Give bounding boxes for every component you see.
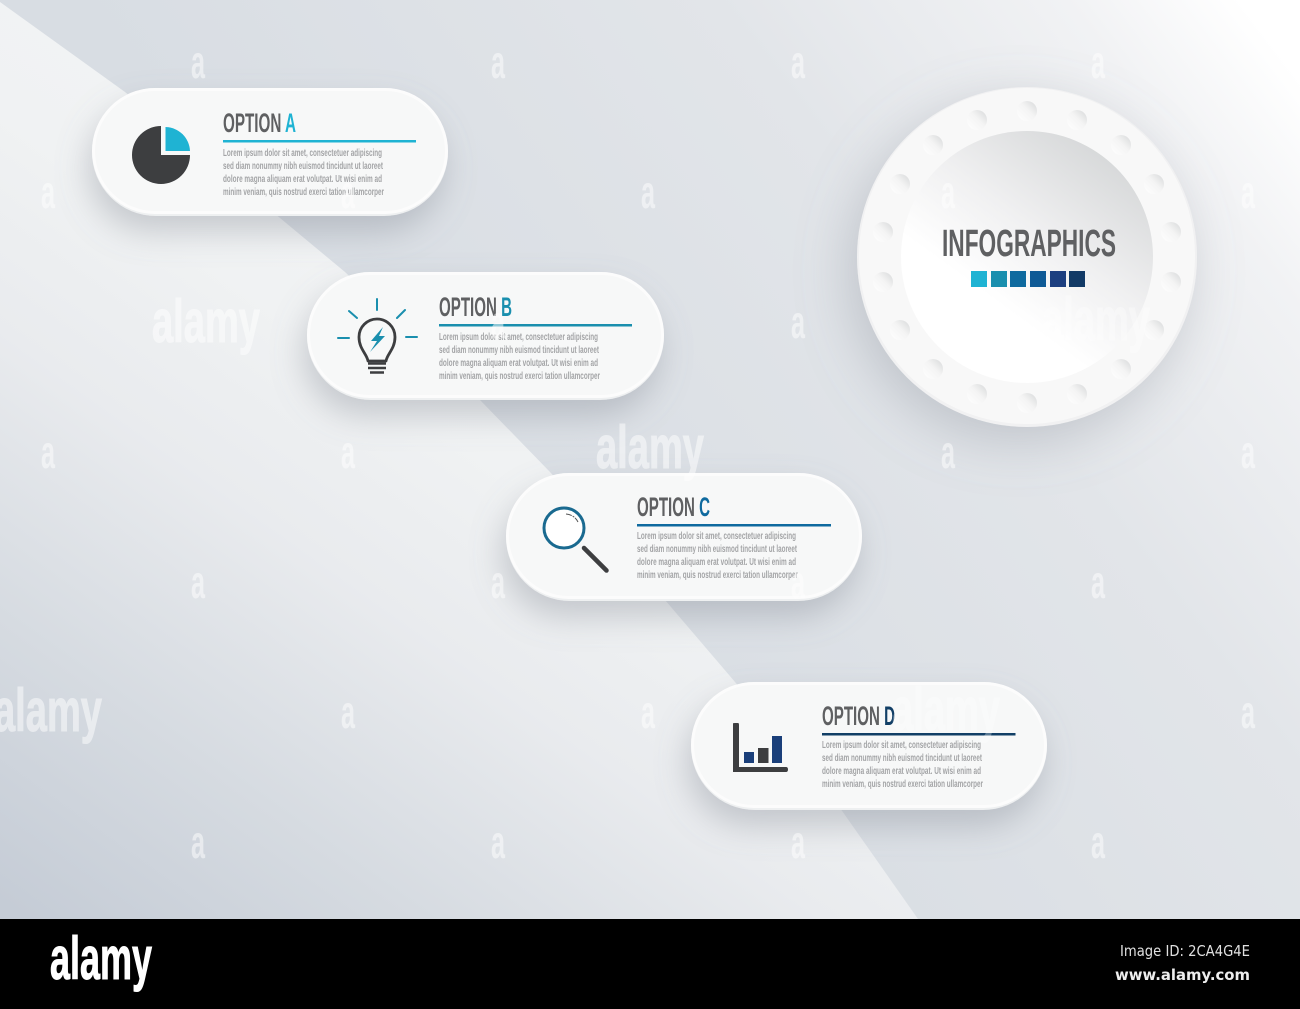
text block D: [822, 739, 983, 790]
watermarks: a: [1241, 426, 1255, 478]
watermarks: a: [491, 36, 505, 88]
watermarks: a: [791, 296, 805, 348]
watermarks: a: [791, 556, 805, 608]
heading: option D: OPTION D: [822, 701, 895, 731]
icon: pie chart: [132, 126, 190, 184]
watermarks: a: [341, 426, 355, 478]
icon: bar chart: [733, 723, 788, 772]
rule A: [223, 140, 416, 142]
text block D: sed diam nonummy nibh euismod tincidunt ut laoreet: [822, 752, 982, 764]
text block A: [223, 147, 384, 198]
text block C: [637, 530, 798, 581]
text block D: minim veniam, quis nostrud exerci tation ullamcorper: [822, 778, 983, 790]
watermarks: a: [941, 426, 955, 478]
watermarks: a: [641, 166, 655, 218]
text block A: sed diam nonummy nibh euismod tincidunt ut laoreet: [223, 160, 383, 172]
dimples ring: [873, 101, 1181, 413]
inner disc: [901, 131, 1153, 383]
watermarks: a: [641, 686, 655, 738]
website: www.alamy.com: [1115, 966, 1250, 984]
rule C: [637, 524, 831, 526]
rule B: [439, 324, 632, 326]
watermarks: a: [1091, 36, 1105, 88]
text block A: dolore magna aliquam erat volutpat. Ut wisi enim ad: [223, 173, 382, 185]
watermarks: a: [491, 816, 505, 868]
watermarks: a: [1241, 686, 1255, 738]
panel: option A: [92, 88, 448, 216]
watermarks: a: [491, 296, 505, 348]
icon: magnifier: [544, 508, 606, 570]
panel: option D: [691, 682, 1047, 810]
rule D: [822, 733, 1016, 736]
watermarks: alamy: [596, 414, 704, 481]
image id: Image ID: 2CA4G4E: [1120, 942, 1250, 960]
heading: infographics: INFOGRAPHICS: [942, 223, 1116, 265]
watermarks: a: [791, 36, 805, 88]
watermarks: a: [341, 686, 355, 738]
colour squares: [971, 271, 1085, 287]
panel: infographics circle: [857, 87, 1197, 427]
watermarks: a: [191, 556, 205, 608]
text block B: minim veniam, quis nostrud exerci tation ullamcorper: [439, 370, 600, 382]
footer logo: alamy: [50, 925, 152, 992]
watermarks: alamy: [1042, 286, 1150, 353]
heading: option B: OPTION B: [439, 292, 512, 322]
heading: option C: OPTION C: [637, 492, 710, 522]
text block B: [439, 331, 600, 382]
watermarks: a: [1091, 816, 1105, 868]
watermarks: a: [941, 166, 955, 218]
text block D: dolore magna aliquam erat volutpat. Ut wisi enim ad: [822, 765, 981, 777]
text block B: Lorem ipsum dolor sit amet, consectetuer adipiscing: [439, 331, 598, 343]
watermarks: a: [191, 36, 205, 88]
text block C: dolore magna aliquam erat volutpat. Ut wisi enim ad: [637, 556, 796, 568]
icon: light bulb: [338, 299, 417, 372]
watermarks: a: [1241, 166, 1255, 218]
text block C: minim veniam, quis nostrud exerci tation ullamcorper: [637, 569, 798, 581]
text block D: Lorem ipsum dolor sit amet, consectetuer adipiscing: [822, 739, 981, 751]
panel: option C: [506, 473, 862, 601]
text block A: Lorem ipsum dolor sit amet, consectetuer adipiscing: [223, 147, 382, 159]
watermarks: a: [41, 166, 55, 218]
text block B: sed diam nonummy nibh euismod tincidunt ut laoreet: [439, 344, 599, 356]
watermarks: a: [1091, 556, 1105, 608]
text block C: Lorem ipsum dolor sit amet, consectetuer adipiscing: [637, 530, 796, 542]
watermarks: a: [791, 816, 805, 868]
footer bar: [0, 919, 1300, 1009]
text block B: dolore magna aliquam erat volutpat. Ut wisi enim ad: [439, 357, 598, 369]
watermarks: a: [191, 816, 205, 868]
watermarks: a: [491, 556, 505, 608]
panel: option B: [307, 272, 664, 400]
text block A: minim veniam, quis nostrud exerci tation ullamcorper: [223, 186, 384, 198]
watermarks: [0, 36, 1255, 868]
heading: option A: OPTION A: [223, 108, 296, 138]
watermarks: alamy: [892, 676, 1000, 743]
watermarks: a: [41, 426, 55, 478]
watermarks: alamy: [152, 288, 260, 355]
text block C: sed diam nonummy nibh euismod tincidunt ut laoreet: [637, 543, 797, 555]
watermarks: a: [341, 166, 355, 218]
